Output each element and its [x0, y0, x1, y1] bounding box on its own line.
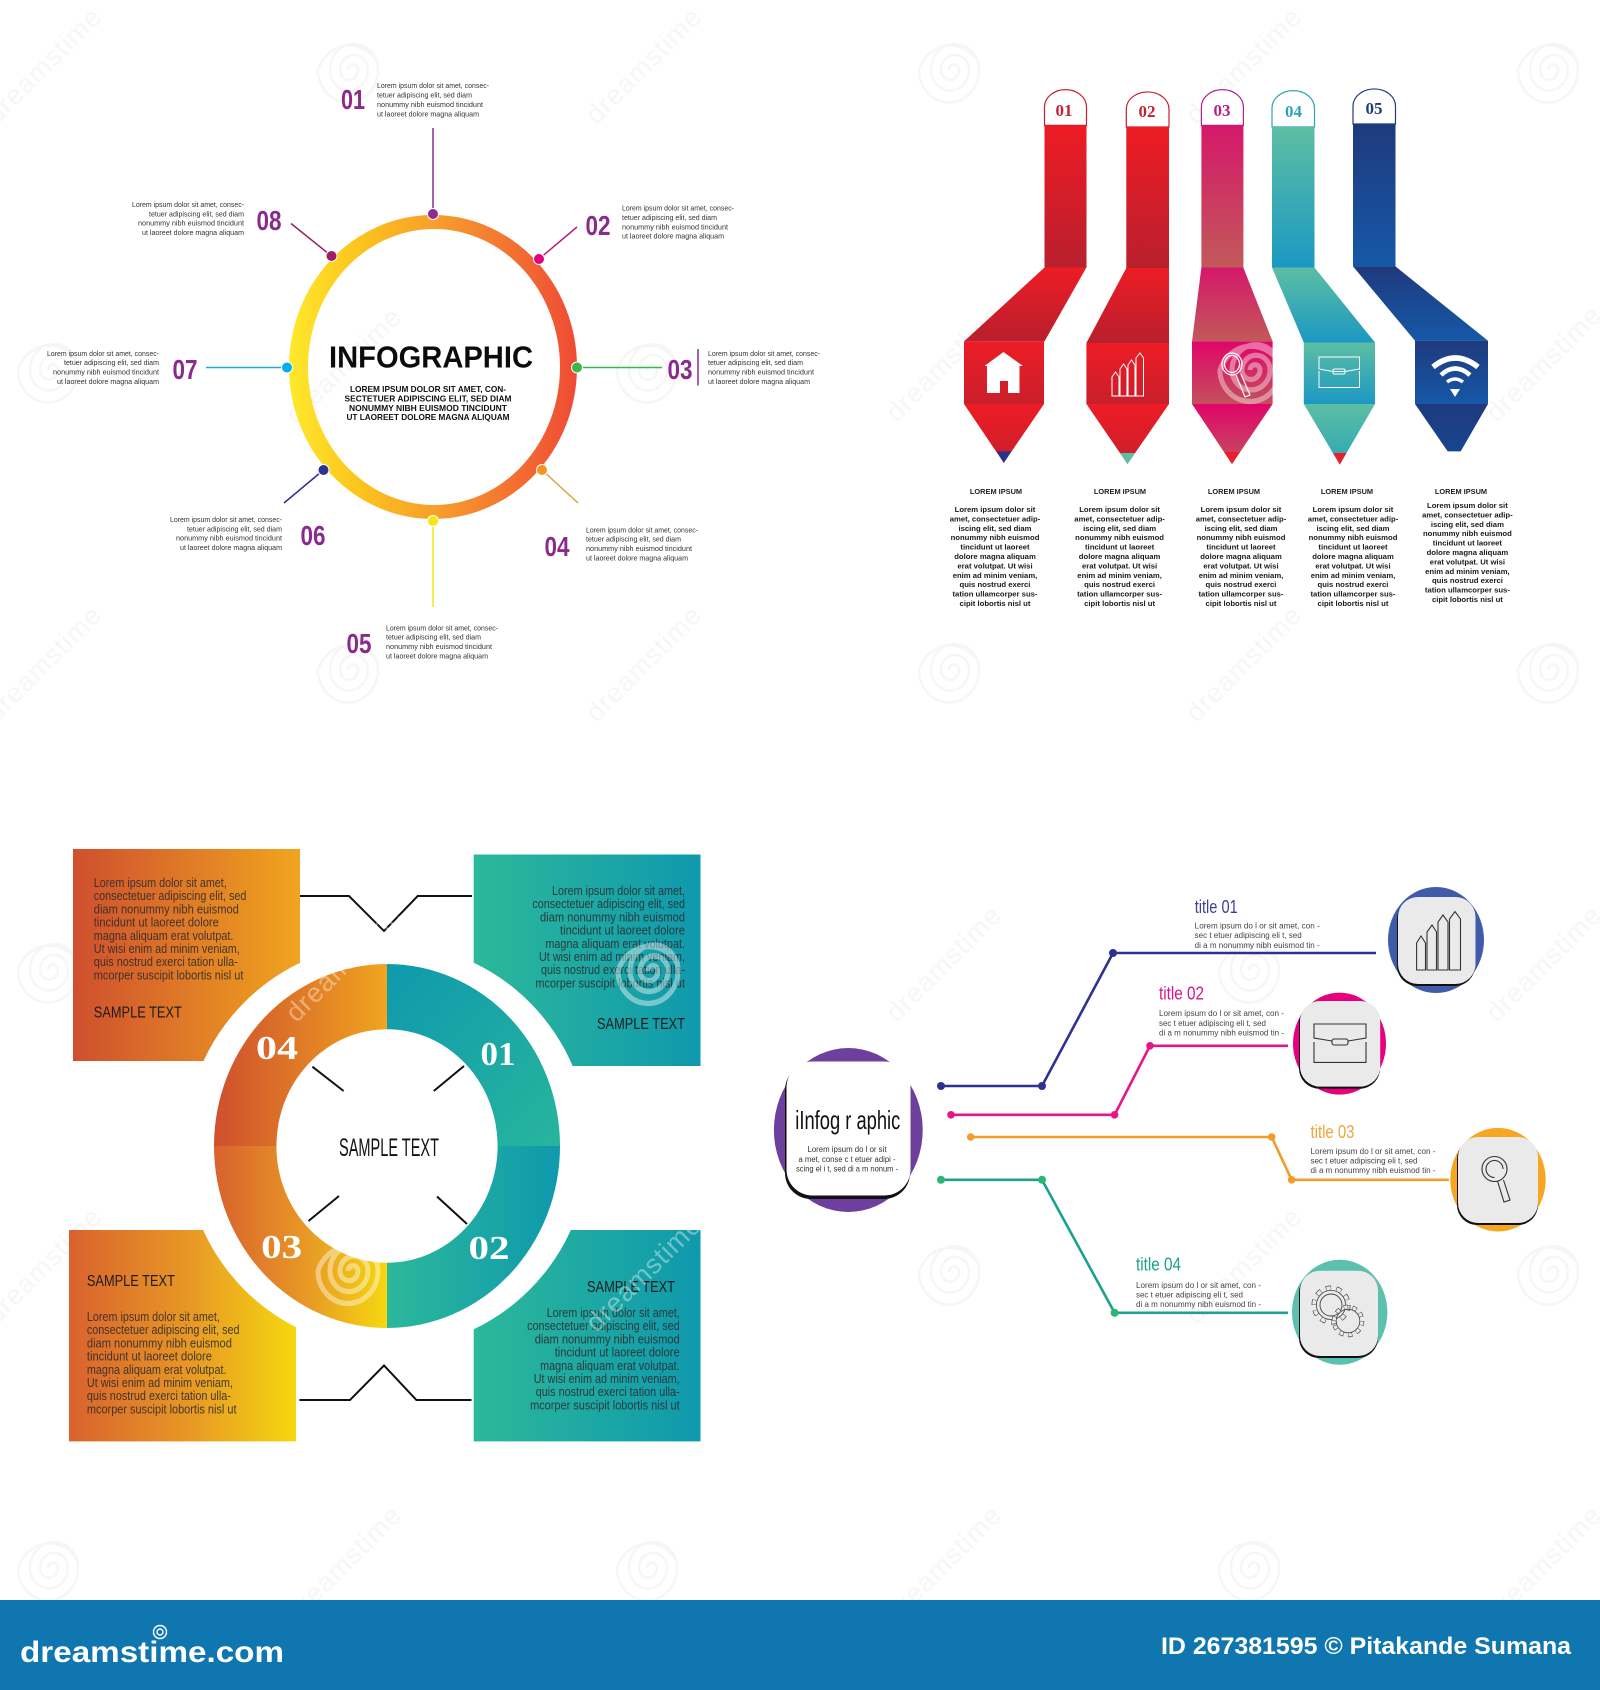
- text 05: iscing elit, sed diam: [1431, 520, 1504, 529]
- text: box 03: quis nostrud exerci tation ulla-: [87, 1389, 231, 1403]
- hub subtext: scing el i t, sed di a m nonum -: [796, 1164, 898, 1174]
- text: box 03: diam nonummy nibh euismod: [87, 1336, 232, 1350]
- text 05: tation ullamcorper sus-: [1425, 586, 1510, 595]
- text: box 04: mcorper suscipit lobortis nisl ut: [94, 968, 244, 982]
- text 01: iscing elit, sed diam: [958, 524, 1032, 533]
- item 03 number: 03: [668, 354, 692, 385]
- text 03: tincidunt ut laoreet: [1206, 543, 1276, 552]
- item 01 number: 01: [341, 84, 365, 115]
- text 04: Lorem ipsum dolor sit: [1313, 505, 1394, 514]
- connector 05: [428, 516, 438, 607]
- connector 04: [536, 464, 578, 503]
- branch 01: [937, 949, 1376, 1090]
- text: box 04: consectetuer adipiscing elit, sed: [94, 889, 246, 903]
- text: box 03: consectetuer adipiscing elit, sed: [87, 1323, 240, 1337]
- item 08 text: nonummy nibh euismod tincidunt: [138, 219, 245, 228]
- item 06 text: Lorem ipsum dolor sit amet, consec-: [170, 515, 282, 524]
- item 06 number: 06: [300, 520, 326, 551]
- text 04: nonummy nibh euismod: [1309, 533, 1398, 542]
- center subtext: UT LAOREET DOLORE MAGNA ALIQUAM: [346, 412, 510, 422]
- text 01: enim ad minim veniam,: [953, 571, 1037, 580]
- text 05: erat volutpat. Ut wisi: [1430, 557, 1505, 566]
- title 04: title 04: [1136, 1255, 1181, 1275]
- item 08 text: tetuer adipiscing elit, sed diam: [149, 209, 244, 218]
- number 04: 04: [1285, 102, 1302, 121]
- watermark text: dreamstime: [1180, 1202, 1308, 1330]
- text 05: nonummy nibh euismod: [1423, 529, 1512, 538]
- text: box 04: quis nostrud exerci tation ulla-: [94, 955, 238, 969]
- text 02: erat volutpat. Ut wisi: [1082, 561, 1157, 570]
- item 08 text: Lorem ipsum dolor sit amet, consec-: [132, 200, 244, 209]
- text: box 02: quis nostrud exerci tation ulla-: [536, 1385, 680, 1399]
- text 04: sec t etuer adipiscing eli t, sed: [1136, 1290, 1243, 1299]
- text 01: Lorem ipsum dolor sit: [955, 505, 1036, 514]
- panel: five ribbon pencils: [950, 89, 1513, 608]
- item 04 text: nonummy nibh euismod tincidunt: [586, 544, 693, 553]
- text 02: tation ullamcorper sus-: [1077, 590, 1163, 599]
- text: box 01: [532, 884, 685, 990]
- item 06 text: tetuer adipiscing elit, sed diam: [187, 524, 282, 533]
- panel: hub with four branches: [774, 887, 1546, 1365]
- text 01: [1195, 922, 1320, 950]
- text 02: Lorem ipsum dolor sit: [1079, 505, 1160, 514]
- text 03: dolore magna aliquam: [1200, 552, 1282, 561]
- text 03: [1310, 1147, 1436, 1175]
- watermark text: dreamstime: [280, 1500, 408, 1628]
- text 01: erat volutpat. Ut wisi: [957, 561, 1033, 570]
- text 03: enim ad minim veniam,: [1199, 571, 1283, 580]
- text 01: sec t etuer adipiscing eli t, sed: [1195, 931, 1302, 940]
- text: box 03: Ut wisi enim ad minim veniam,: [87, 1376, 233, 1390]
- text 01: dolore magna aliquam: [954, 552, 1036, 561]
- center subtext: NONUMMY NIBH EUISMOD TINCIDUNT: [349, 403, 508, 413]
- text 01: di a m nonummy nibh euismod tin -: [1195, 941, 1320, 950]
- text 05: cipit lobortis nisl ut: [1432, 595, 1503, 604]
- watermark text on panel: dreamstime: [580, 1210, 708, 1338]
- connector 03: [572, 362, 662, 373]
- ring quadrant 04: [214, 964, 387, 1146]
- hub title: iInfog r aphic: [795, 1105, 900, 1135]
- text 02: dolore magna aliquam: [1079, 552, 1161, 561]
- item 07 text: nonummy nibh euismod tincidunt: [53, 368, 160, 377]
- text 03: sec t etuer adipiscing eli t, sed: [1310, 1156, 1418, 1165]
- number 02: 02: [1138, 102, 1156, 121]
- number 03: 03: [261, 1229, 302, 1266]
- watermark text: dreamstime: [880, 900, 1008, 1028]
- text: box 02: magna aliquam erat volutpat.: [540, 1359, 680, 1373]
- connector 08: [291, 224, 337, 262]
- watermark text: dreamstime: [880, 1500, 1008, 1628]
- icon badge 03: magnifier: [1450, 1128, 1546, 1231]
- text 02: quis nostrud exerci: [1084, 580, 1155, 589]
- watermark text on panel: [280, 900, 708, 1338]
- number 04: 04: [256, 1030, 298, 1067]
- text 03: quis nostrud exerci: [1206, 580, 1276, 589]
- text 01: quis nostrud exerci: [960, 580, 1030, 589]
- item 03 text: tetuer adipiscing elit, sed diam: [708, 358, 803, 367]
- item 06 text: [170, 515, 283, 552]
- text 03: Lorem ipsum dolor sit: [1201, 505, 1282, 514]
- text 02: cipit lobortis nisl ut: [1084, 599, 1155, 608]
- ribbon 03: [1192, 90, 1280, 464]
- item 05 text: tetuer adipiscing elit, sed diam: [386, 633, 481, 642]
- text 03: di a m nonummy nibh euismod tin -: [1310, 1166, 1436, 1175]
- watermark text: dreamstime: [580, 2, 708, 130]
- icon badge 01: bars: [1388, 887, 1484, 993]
- text 02: tincidunt ut laoreet: [1085, 543, 1155, 552]
- text 01: cipit lobortis nisl ut: [960, 599, 1031, 608]
- text: box 02: consectetuer adipiscing elit, sed: [527, 1319, 680, 1333]
- item 03 text: nonummy nibh euismod tincidunt: [708, 368, 815, 377]
- text: box 01: magna aliquam erat volutpat.: [545, 937, 685, 951]
- text 03: Lorem ipsum do l or sit amet, con -: [1310, 1147, 1436, 1156]
- item 02 text: [622, 204, 734, 241]
- label: box 01: SAMPLE TEXT: [597, 1016, 685, 1033]
- text 02: iscing elit, sed diam: [1083, 524, 1156, 533]
- watermark text: dreamstime: [880, 300, 1008, 428]
- text 03: amet, consectetuer adip-: [1196, 514, 1287, 523]
- text: box 04: tincidunt ut laoreet dolore: [94, 916, 219, 930]
- text: box 03: Lorem ipsum dolor sit amet,: [87, 1310, 220, 1324]
- text: box 03: [87, 1310, 240, 1416]
- text 03: nonummy nibh euismod: [1197, 533, 1286, 542]
- item 02 text: Lorem ipsum dolor sit amet, consec-: [622, 204, 734, 213]
- text: box 01: mcorper suscipit lobortis nisl ut: [535, 976, 685, 990]
- item 05 text: ut laoreet dolore magna aliquam: [386, 651, 488, 660]
- label: box 03: SAMPLE TEXT: [87, 1273, 175, 1290]
- number 01: 01: [480, 1036, 516, 1073]
- item 05 number: 05: [346, 628, 372, 659]
- ribbon 04: [1272, 91, 1375, 465]
- text 05: Lorem ipsum dolor sit: [1427, 501, 1508, 510]
- text 02: [1159, 1009, 1284, 1037]
- item 07 text: Lorem ipsum dolor sit amet, consec-: [47, 349, 159, 358]
- branch 04: [937, 1176, 1288, 1317]
- hub subtext: [796, 1145, 898, 1174]
- heading 05: LOREM IPSUM: [1435, 487, 1487, 496]
- watermark text: dreamstime: [580, 600, 708, 728]
- text 01: tation ullamcorper sus-: [952, 590, 1038, 599]
- heading 03: LOREM IPSUM: [1208, 487, 1260, 496]
- text 01: amet, consectetuer adip-: [950, 514, 1041, 523]
- text 02: sec t etuer adipiscing eli t, sed: [1159, 1019, 1266, 1028]
- item 06 text: nonummy nibh euismod tincidunt: [176, 534, 283, 543]
- text 02: amet, consectetuer adip-: [1074, 514, 1165, 523]
- box 02: [474, 1230, 700, 1441]
- text 05: dolore magna aliquam: [1427, 548, 1508, 557]
- text 05: tincidunt ut laoreet: [1433, 539, 1502, 548]
- item 07 text: ut laoreet dolore magna aliquam: [57, 377, 159, 386]
- item 02 number: 02: [586, 210, 610, 241]
- item 01 text: nonummy nibh euismod tincidunt: [377, 100, 484, 109]
- item 03 text: ut laoreet dolore magna aliquam: [708, 377, 810, 386]
- watermark text: dreamstime: [1180, 600, 1308, 728]
- box 03: [69, 1230, 296, 1441]
- text 02: Lorem ipsum do l or sit amet, con -: [1159, 1009, 1284, 1018]
- ribbon 01: [964, 90, 1086, 463]
- text 04: Lorem ipsum do l or sit amet, con -: [1136, 1281, 1261, 1290]
- text 01: nonummy nibh euismod: [951, 533, 1040, 542]
- item 04 number: 04: [544, 531, 570, 562]
- title 03: title 03: [1310, 1122, 1354, 1142]
- hub subtext: Lorem ipsum do l or sit: [808, 1145, 887, 1154]
- white gap around ring: [185, 943, 589, 1349]
- ring quadrant 03: [214, 1146, 387, 1328]
- item 04 text: ut laoreet dolore magna aliquam: [586, 553, 688, 562]
- box 01: [474, 854, 700, 1066]
- item 07 number: 07: [172, 354, 198, 385]
- branch 03: [967, 1133, 1449, 1184]
- center title: INFOGRAPHIC: [329, 340, 533, 374]
- watermark text: dreamstime: [280, 302, 408, 430]
- icon: briefcase: [1319, 357, 1360, 388]
- branch 02: [947, 1042, 1288, 1119]
- item 04 text: tetuer adipiscing elit, sed diam: [586, 535, 681, 544]
- text: box 04: diam nonummy nibh euismod: [94, 902, 239, 916]
- title 01: title 01: [1195, 897, 1238, 917]
- text 04: tincidunt ut laoreet: [1318, 543, 1388, 552]
- center subtext: SECTETUER ADIPISCING ELIT, SED DIAM: [344, 394, 512, 404]
- text: box 01: consectetuer adipiscing elit, sed: [532, 897, 685, 911]
- text 04: dolore magna aliquam: [1312, 552, 1394, 561]
- text 04: amet, consectetuer adip-: [1308, 514, 1399, 523]
- panel: circular infographic with eight items: [47, 81, 820, 660]
- text: box 03: tincidunt ut laoreet dolore: [87, 1350, 212, 1364]
- item 07 text: [47, 349, 160, 386]
- item 02 text: nonummy nibh euismod tincidunt: [622, 222, 729, 231]
- footer credit: ID 267381595 © Pitakande Sumana: [1161, 1633, 1572, 1660]
- text: box 04: Ut wisi enim ad minim veniam,: [94, 942, 240, 956]
- item 02 text: tetuer adipiscing elit, sed diam: [622, 213, 717, 222]
- icon: house: [984, 352, 1023, 393]
- item 01 text: Lorem ipsum dolor sit amet, consec-: [377, 81, 489, 90]
- watermark text on panel: dreamstime: [280, 900, 408, 1028]
- heading 04: LOREM IPSUM: [1321, 487, 1373, 496]
- heading 01: LOREM IPSUM: [970, 487, 1022, 496]
- ring: [289, 215, 577, 519]
- text 04: iscing elit, sed diam: [1316, 524, 1390, 533]
- center label: SAMPLE TEXT: [339, 1134, 439, 1162]
- footer logo text: dreamstime.com: [20, 1636, 284, 1669]
- item 02 text: ut laoreet dolore magna aliquam: [622, 232, 724, 241]
- text 01: Lorem ipsum do l or sit amet, con -: [1195, 922, 1320, 930]
- label: box 02: SAMPLE TEXT: [587, 1279, 675, 1296]
- panel: four-quadrant ring: [69, 849, 708, 1441]
- ribbon 05: [1353, 89, 1488, 451]
- icon: footer spiral: [154, 1626, 166, 1638]
- text 04: erat volutpat. Ut wisi: [1315, 561, 1391, 570]
- item 03 text: [708, 349, 820, 386]
- text: box 01: quis nostrud exerci tation ulla-: [541, 963, 685, 977]
- text: box 01: diam nonummy nibh euismod: [540, 910, 685, 924]
- text 05: amet, consectetuer adip-: [1422, 510, 1513, 519]
- connector 07: [206, 362, 292, 373]
- item 01 text: [377, 81, 489, 118]
- ring quadrant 01: [387, 964, 560, 1146]
- heading 02: LOREM IPSUM: [1094, 487, 1146, 496]
- hub subtext: a met, conse c t etuer adipi -: [798, 1155, 896, 1164]
- item 04 text: Lorem ipsum dolor sit amet, consec-: [586, 525, 698, 534]
- text: box 03: mcorper suscipit lobortis nisl ut: [87, 1402, 237, 1416]
- item 04 text: [586, 525, 698, 562]
- connector 02: [534, 227, 577, 264]
- text: box 04: magna aliquam erat volutpat.: [94, 929, 233, 943]
- text 02: nonummy nibh euismod: [1075, 533, 1164, 542]
- text 04: tation ullamcorper sus-: [1310, 590, 1396, 599]
- watermark spirals on panel: [318, 945, 678, 1303]
- text 04: cipit lobortis nisl ut: [1318, 599, 1389, 608]
- text: box 01: Lorem ipsum dolor sit amet,: [552, 884, 685, 898]
- item 01 text: tetuer adipiscing elit, sed diam: [377, 90, 472, 100]
- watermark text: dreamstime: [1180, 2, 1308, 130]
- text 01: tincidunt ut laoreet: [960, 543, 1030, 552]
- text 02: di a m nonummy nibh euismod tin -: [1159, 1028, 1284, 1037]
- number 05: 05: [1366, 99, 1382, 118]
- text: box 02: diam nonummy nibh euismod: [535, 1332, 680, 1346]
- text 04: di a m nonummy nibh euismod tin -: [1136, 1300, 1261, 1309]
- label: box 04: SAMPLE TEXT: [94, 1005, 182, 1022]
- text 03: erat volutpat. Ut wisi: [1203, 561, 1279, 570]
- text 03: cipit lobortis nisl ut: [1206, 599, 1277, 608]
- text 02: enim ad minim veniam,: [1077, 571, 1162, 580]
- text: box 02: [527, 1306, 680, 1412]
- watermark spiral on ribbon: [1220, 345, 1280, 402]
- connector 01: [428, 128, 438, 220]
- number 01: 01: [1056, 101, 1072, 120]
- hub circle: [774, 1048, 923, 1212]
- text 03: tation ullamcorper sus-: [1198, 590, 1284, 599]
- text: box 04: [94, 876, 246, 982]
- tick lines: [299, 896, 472, 1400]
- text 03: iscing elit, sed diam: [1204, 524, 1278, 533]
- number 03: 03: [1214, 101, 1230, 120]
- center subtext: [344, 384, 512, 422]
- text: box 01: tincidunt ut laoreet dolore: [560, 924, 685, 938]
- title 02: title 02: [1159, 984, 1204, 1004]
- text 04: quis nostrud exerci: [1318, 580, 1388, 589]
- item 05 text: Lorem ipsum dolor sit amet, consec-: [386, 623, 498, 632]
- item 08 text: ut laoreet dolore magna aliquam: [142, 228, 244, 237]
- text 04: enim ad minim veniam,: [1311, 571, 1395, 580]
- text 05: enim ad minim veniam,: [1425, 567, 1510, 576]
- footer bar: [0, 1600, 1600, 1690]
- item 03 divider: [697, 349, 699, 386]
- item 03 text: Lorem ipsum dolor sit amet, consec-: [708, 349, 820, 358]
- item 05 text: [386, 623, 498, 660]
- text: box 01: Ut wisi enim ad minim veniam,: [539, 950, 685, 964]
- connector 06: [284, 464, 329, 503]
- icon: bar chart: [1112, 353, 1144, 396]
- item 07 text: tetuer adipiscing elit, sed diam: [64, 358, 159, 367]
- item 01 text: ut laoreet dolore magna aliquam: [377, 109, 479, 118]
- item 06 text: ut laoreet dolore magna aliquam: [180, 543, 282, 552]
- icon badge 04: gears: [1292, 1260, 1387, 1365]
- text 04: [1136, 1281, 1261, 1309]
- center subtext: LOREM IPSUM DOLOR SIT AMET, CON-: [350, 384, 506, 394]
- icon: wifi: [1433, 358, 1478, 397]
- number 02: 02: [468, 1230, 510, 1267]
- icon badge 02: briefcase: [1293, 993, 1386, 1095]
- item 08 text: [132, 200, 245, 237]
- box 04: [73, 849, 300, 1061]
- text: box 03: magna aliquam erat volutpat.: [87, 1363, 227, 1377]
- item 05 text: nonummy nibh euismod tincidunt: [386, 642, 493, 651]
- text: box 02: tincidunt ut laoreet dolore: [555, 1346, 680, 1360]
- text: box 02: mcorper suscipit lobortis nisl ut: [530, 1398, 680, 1412]
- text: box 02: Lorem ipsum dolor sit amet,: [547, 1306, 680, 1320]
- ribbon 02: [1086, 92, 1169, 464]
- text 05: quis nostrud exerci: [1432, 576, 1503, 585]
- item 08 number: 08: [256, 205, 282, 236]
- icon: magnifier: [1222, 353, 1250, 397]
- ring quadrant 02: [387, 1146, 560, 1328]
- text: box 04: Lorem ipsum dolor sit amet,: [94, 876, 227, 890]
- text: box 02: Ut wisi enim ad minim veniam,: [534, 1372, 680, 1386]
